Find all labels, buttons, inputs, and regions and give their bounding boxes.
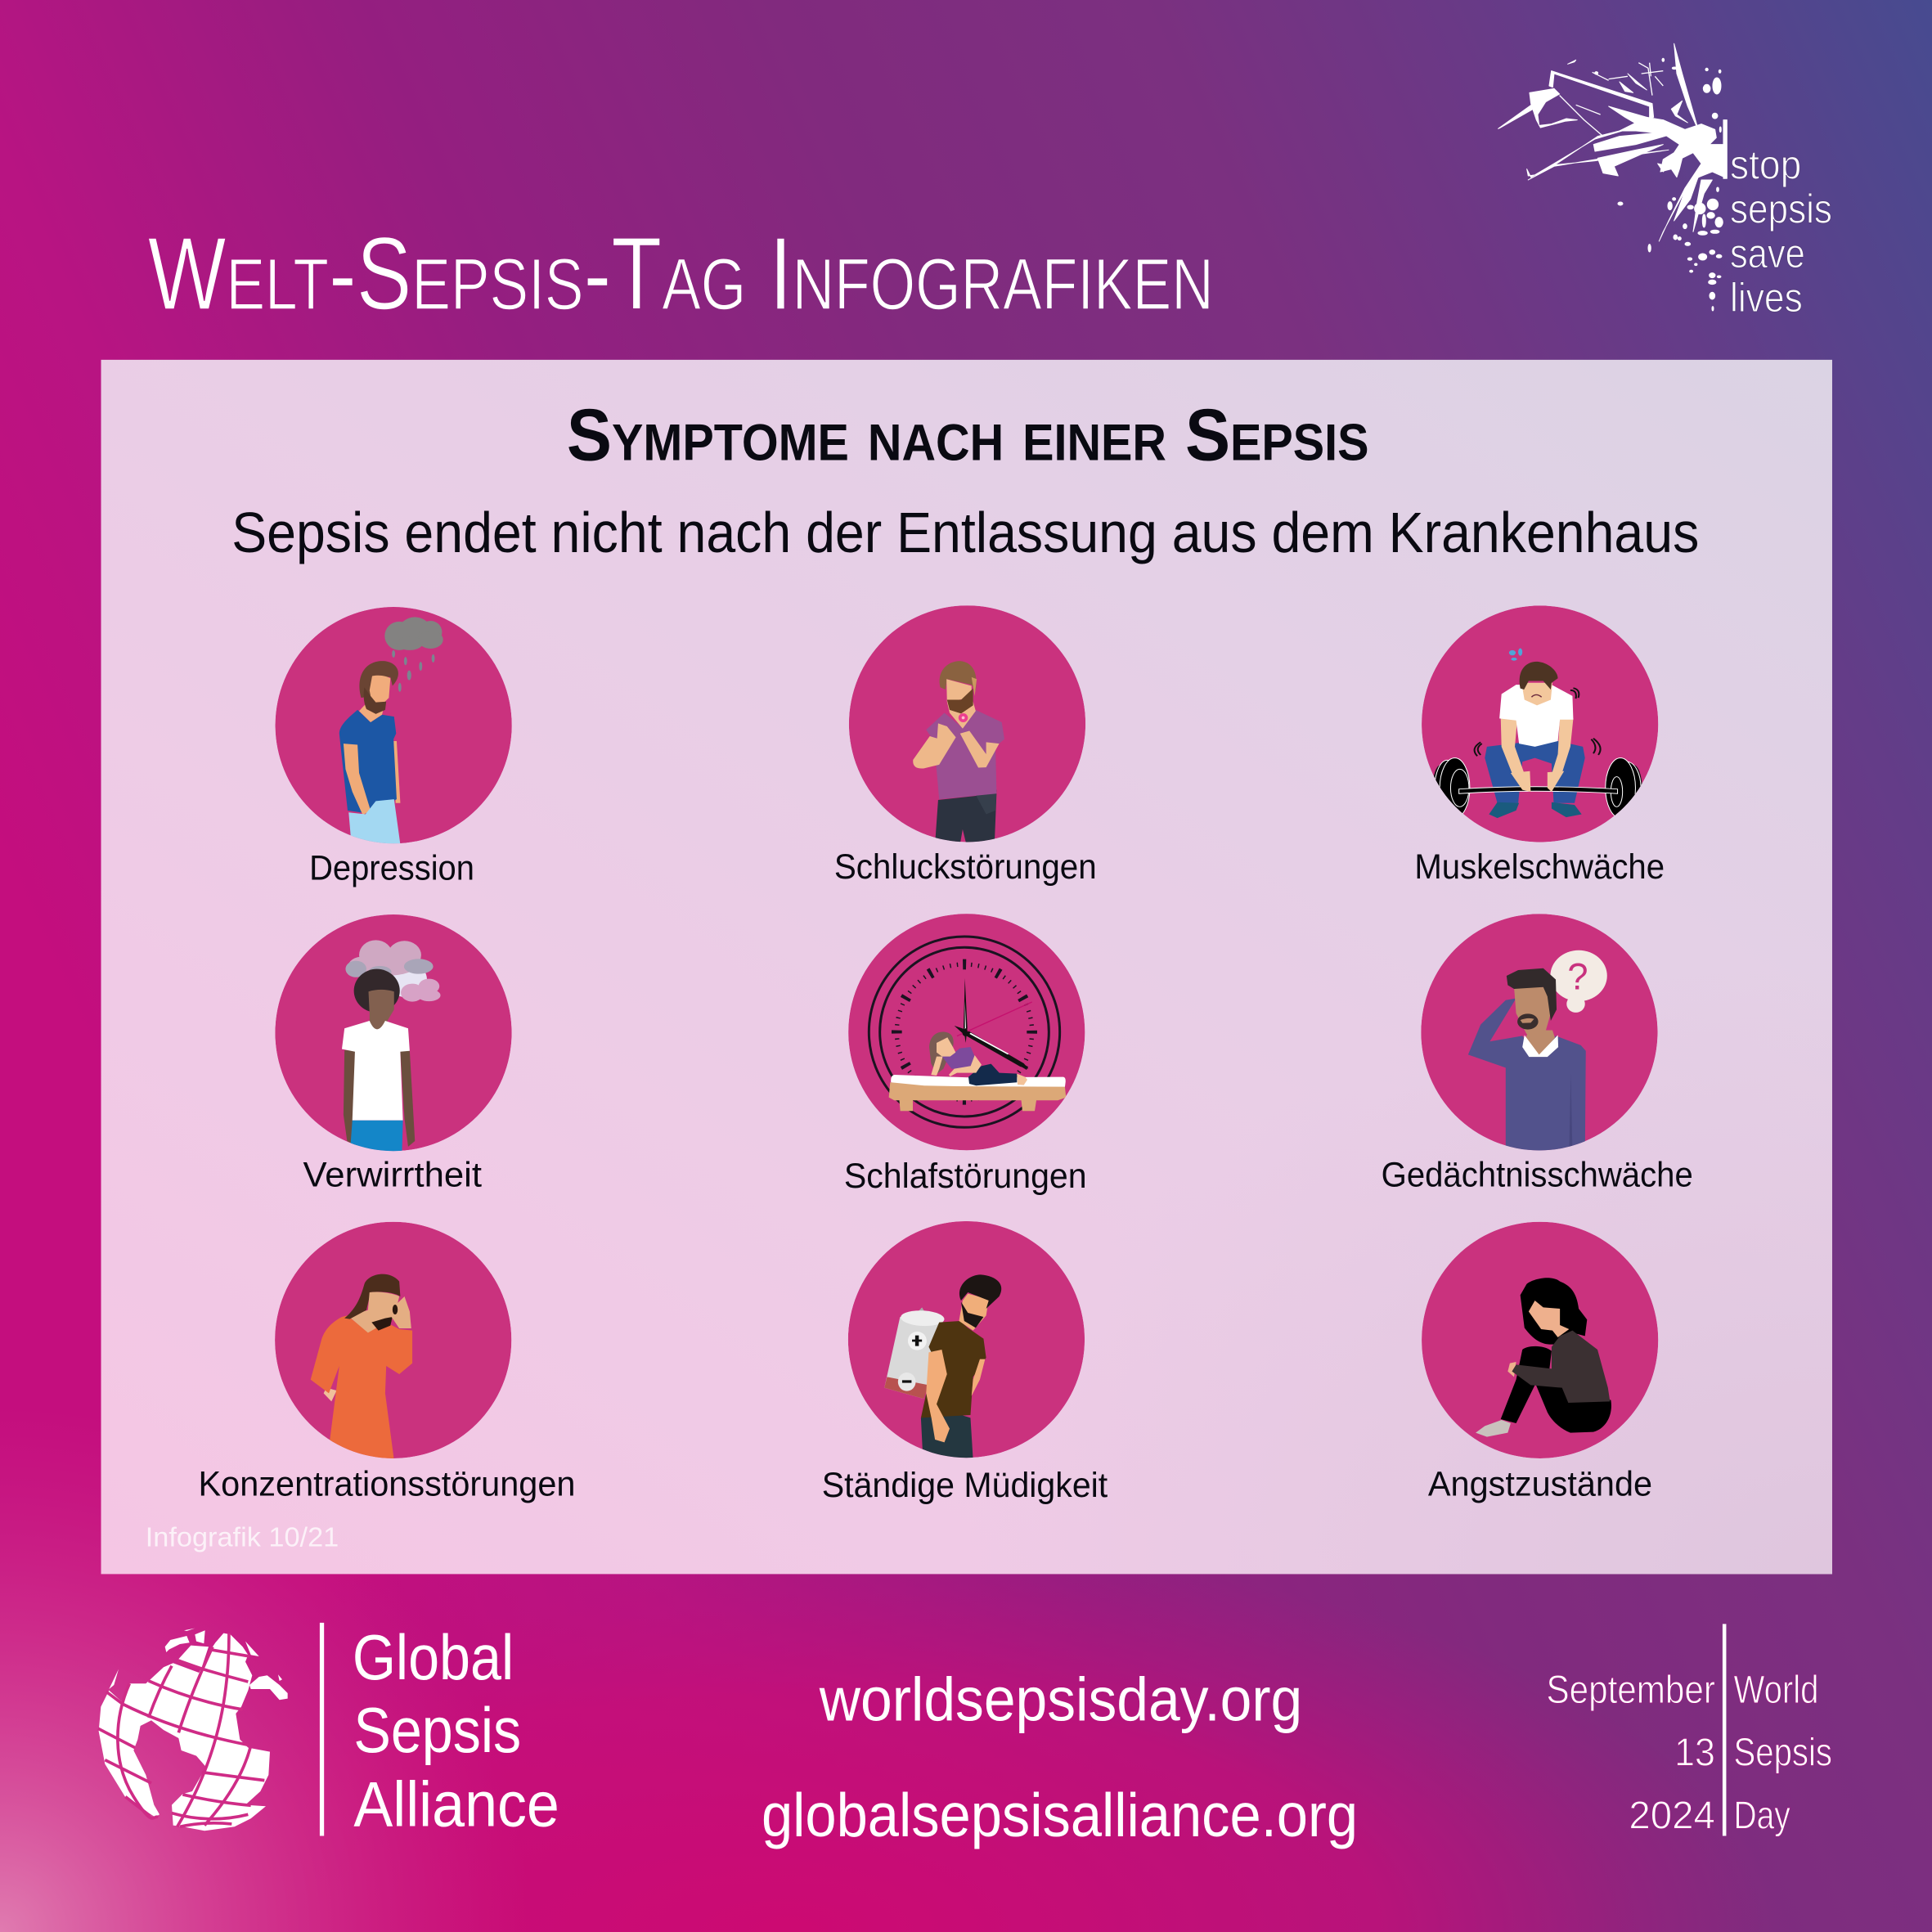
label: Muskelschwäche: Muskelschwäche (1414, 847, 1665, 886)
event: Sepsis: Sepsis (1733, 1731, 1832, 1775)
icon: sleep disorder (848, 914, 1085, 1150)
divider (320, 1623, 324, 1836)
icon: anxiety (1422, 1222, 1658, 1458)
clock face (869, 937, 1060, 1127)
logo: stop sepsis save lives (1498, 43, 1832, 321)
icon: concentration disorder (275, 1222, 511, 1460)
icon: constant fatigue (848, 1221, 1085, 1460)
panel heading: Symptome nach einer Sepsis (567, 394, 1369, 477)
battery backpack (919, 1307, 924, 1310)
logo text: Global: Global (353, 1621, 514, 1693)
icon: confusion (275, 914, 512, 1156)
title: Welt-Sepsis-Tag Infografiken (148, 215, 1214, 331)
date: 13: 13 (1674, 1731, 1715, 1775)
label: Schluckstörungen: Schluckstörungen (834, 847, 1097, 886)
icon: memory weakness (1421, 914, 1658, 1156)
panel: symptoms (101, 360, 1832, 1574)
label: Konzentrationsstörungen: Konzentrationsstörungen (199, 1465, 575, 1503)
icon: globe (98, 1629, 288, 1831)
event: Day: Day (1733, 1793, 1790, 1837)
event: World: World (1733, 1668, 1818, 1712)
logo text: stop: stop (1730, 142, 1801, 187)
label: Angstzustände: Angstzustände (1428, 1465, 1652, 1503)
infographic number: Infografik 10/21 (146, 1523, 339, 1553)
icon: dysphagia (849, 605, 1085, 844)
logo text: sepsis: sepsis (1730, 186, 1832, 232)
date: September: September (1547, 1668, 1715, 1712)
label: Schlafstörungen: Schlafstörungen (844, 1157, 1087, 1195)
footer: Global Sepsis Alliance logo (98, 1621, 559, 1840)
logo text: Sepsis: Sepsis (353, 1694, 521, 1766)
man (921, 1415, 973, 1458)
url: globalsepsisalliance.org: globalsepsisalliance.org (762, 1781, 1358, 1849)
icon: muscle weakness (1422, 605, 1658, 842)
label: Depression: Depression (309, 849, 474, 887)
divider (1723, 1624, 1726, 1836)
icon: depression (276, 607, 512, 844)
footer: World Sepsis Day date (1547, 1624, 1832, 1837)
panel subheading: Sepsis endet nicht nach der Entlassung aus dem Krankenhaus (231, 501, 1699, 564)
url: worldsepsisday.org: worldsepsisday.org (819, 1665, 1302, 1734)
icon: paint splash (1498, 43, 1727, 311)
logo text: Alliance: Alliance (353, 1768, 559, 1840)
label: Ständige Müdigkeit: Ständige Müdigkeit (822, 1466, 1108, 1504)
logo text: lives: lives (1730, 275, 1803, 321)
date: 2024: 2024 (1629, 1793, 1715, 1837)
label: Gedächtnisschwäche: Gedächtnisschwäche (1382, 1156, 1693, 1194)
sleeping woman (929, 1032, 954, 1074)
logo text: save: save (1730, 231, 1805, 276)
bed (900, 1100, 913, 1111)
label: Verwirrtheit: Verwirrtheit (303, 1156, 482, 1194)
question mark: ? (1567, 956, 1588, 998)
